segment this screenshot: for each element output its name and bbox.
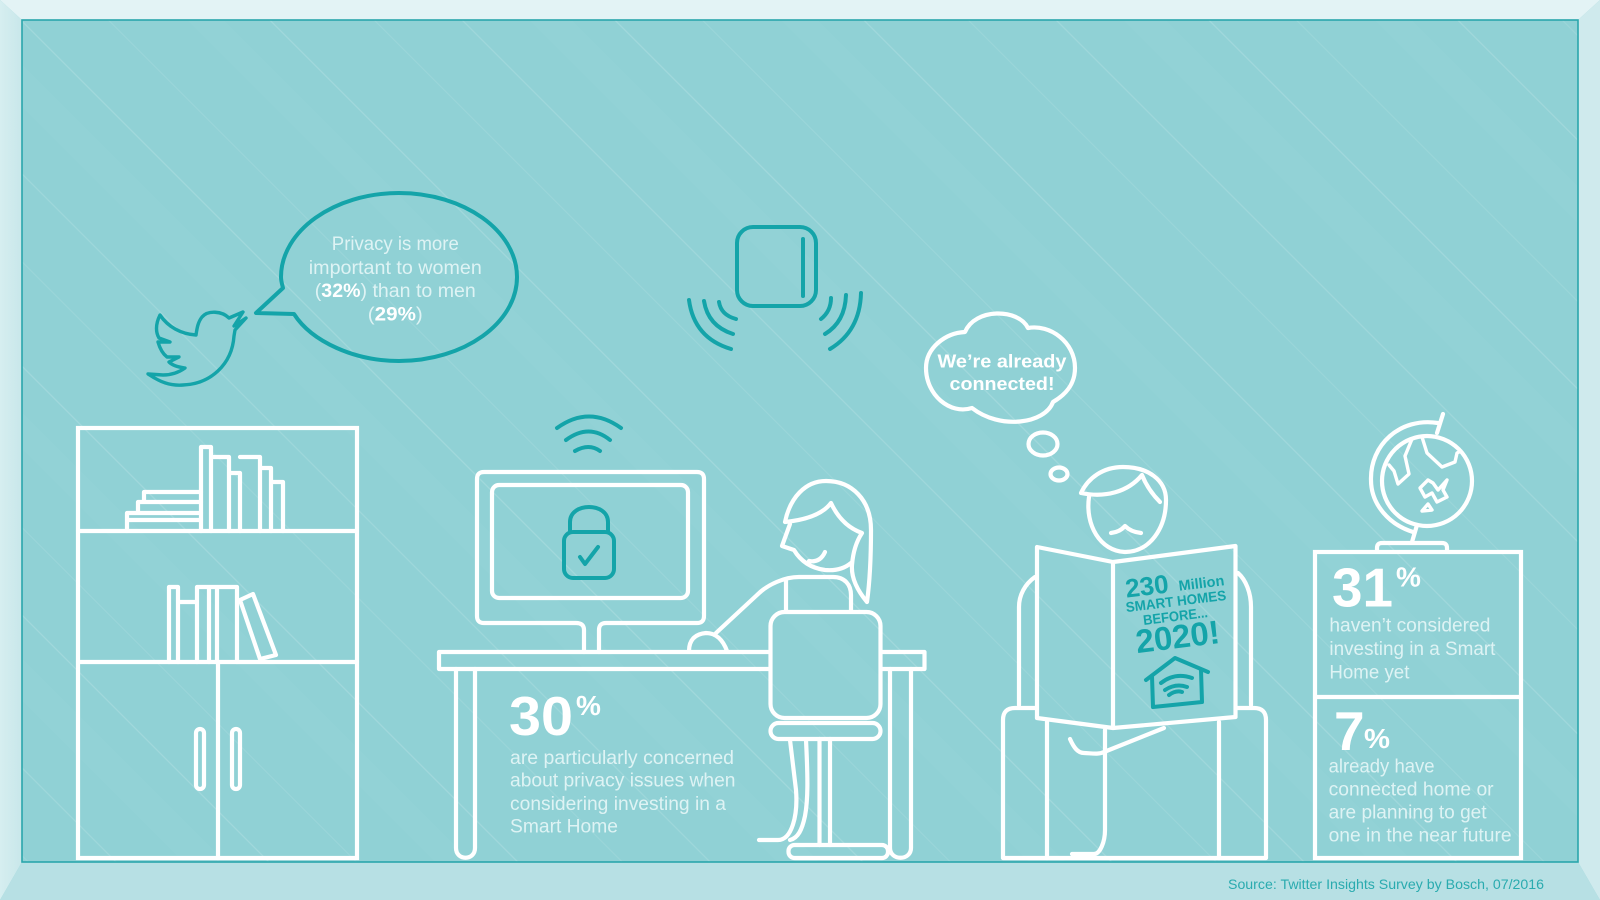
stat: 30 percent: % bbox=[576, 690, 601, 721]
callout: privacy speech bubble: Privacy is more bbox=[332, 234, 459, 255]
stat: 31 percent bbox=[1329, 557, 1496, 683]
thought bubble: connected! bbox=[950, 374, 1054, 394]
door handles bbox=[196, 729, 240, 789]
icon: wifi house bbox=[1146, 658, 1208, 707]
books: middle shelf bbox=[169, 587, 276, 662]
arm and torso bbox=[716, 577, 851, 633]
stat: 31 percent: haven’t considered bbox=[1329, 616, 1490, 637]
callout: privacy speech bubble: (29%) bbox=[368, 304, 423, 326]
office chair bbox=[770, 612, 888, 858]
stat: 7 percent: are planning to get bbox=[1329, 803, 1487, 824]
stat: 30 percent bbox=[509, 685, 736, 838]
stat: 30 percent: considering investing in a bbox=[510, 794, 726, 815]
stat: 7 percent: 7 bbox=[1334, 700, 1365, 762]
icon: twitter bird bbox=[148, 312, 246, 385]
magazine headline: BEFORE... bbox=[1142, 604, 1209, 628]
stat: 30 percent: 30 bbox=[509, 685, 573, 747]
icon: wifi above monitor bbox=[557, 416, 621, 451]
head and hair bbox=[1081, 467, 1166, 552]
globe on cabinet bbox=[1371, 414, 1472, 551]
stat: 7 percent bbox=[1329, 700, 1512, 847]
stat: 31 percent: Home yet bbox=[1329, 662, 1410, 683]
computer monitor bbox=[477, 472, 704, 652]
icon: padlock bbox=[564, 507, 614, 578]
stat: 7 percent: % bbox=[1364, 723, 1390, 754]
thought bubble: We’re already bbox=[938, 352, 1066, 372]
hand on mouse bbox=[689, 633, 727, 651]
moustache bbox=[1111, 526, 1141, 533]
thought bubble bbox=[926, 313, 1075, 480]
woman at desk bbox=[689, 481, 871, 840]
icon: smart device with signal waves bbox=[689, 227, 861, 349]
stat: 30 percent: about privacy issues when bbox=[510, 771, 736, 792]
stat: 30 percent: are particularly concerned bbox=[510, 748, 734, 769]
stat: 7 percent: connected home or bbox=[1329, 780, 1494, 801]
open magazine bbox=[1037, 546, 1236, 728]
stat: 31 percent: 31 bbox=[1332, 557, 1393, 619]
magazine headline: 230 bbox=[1124, 569, 1170, 604]
body and hand bbox=[1070, 728, 1164, 854]
magazine headline: 2020! bbox=[1133, 613, 1222, 660]
magazine headline: Million bbox=[1178, 573, 1225, 595]
stat: 31 percent: % bbox=[1396, 562, 1421, 593]
bookcase bbox=[78, 428, 357, 858]
man reading bbox=[1019, 467, 1251, 854]
hair bbox=[785, 481, 871, 602]
face bbox=[782, 524, 851, 570]
callout: privacy speech bubble bbox=[256, 193, 517, 361]
magazine headline bbox=[1124, 569, 1227, 660]
callout: privacy speech bubble: important to women bbox=[309, 258, 482, 279]
callout: privacy speech bubble: (32%) than to men bbox=[315, 281, 476, 302]
stat: 31 percent: investing in a Smart bbox=[1329, 639, 1496, 660]
armchair bbox=[1003, 708, 1266, 858]
stat: 7 percent: one in the near future bbox=[1329, 826, 1512, 847]
legs bbox=[759, 740, 807, 840]
cabinet with statistics bbox=[1315, 552, 1521, 858]
stat: 30 percent: Smart Home bbox=[510, 817, 618, 838]
source note: Source: Twitter Insights Survey by Bosch, 07/2016 bbox=[1228, 876, 1544, 892]
stat: 7 percent: already have bbox=[1329, 757, 1435, 778]
desk bbox=[439, 652, 924, 858]
books: upper shelf bbox=[127, 447, 283, 531]
magazine headline: SMART HOMES bbox=[1125, 587, 1227, 615]
arms bbox=[1019, 573, 1251, 705]
